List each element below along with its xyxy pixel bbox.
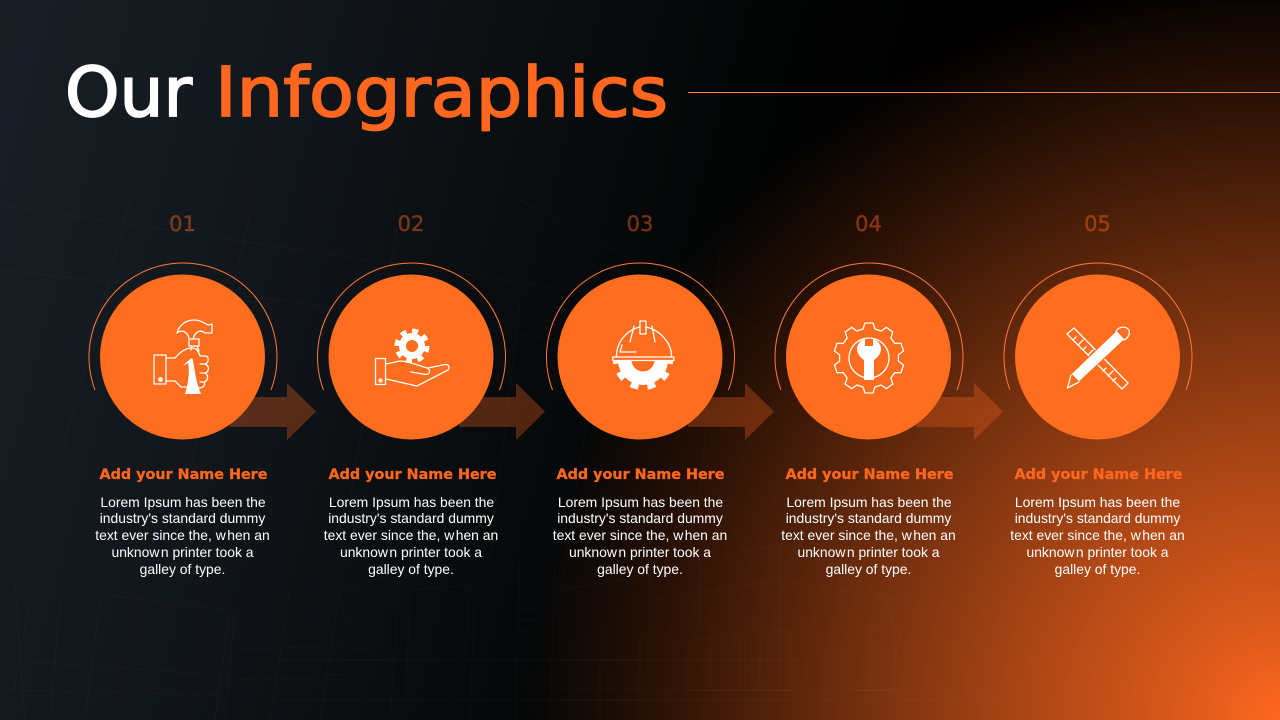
arrow 3 (688, 383, 774, 440)
body text 5 (1010, 494, 1185, 577)
arc 4 (775, 263, 963, 390)
number 04: 04 (855, 212, 882, 236)
arrow 2 (459, 383, 545, 440)
title: Our (65, 53, 193, 133)
title: Infographics (215, 53, 668, 133)
body text 1: text ever since the, when an (95, 527, 270, 543)
body text 2: Lorem Ipsum has been the (329, 494, 494, 510)
body text 1: industry's standard dummy (100, 510, 265, 526)
circle 3 (558, 274, 722, 440)
heading 2: Add your Name Here (328, 467, 497, 483)
circle 1 (100, 274, 265, 440)
body text 5: industry's standard dummy (1015, 510, 1180, 526)
step 3 (546, 212, 774, 577)
body text 4: galley of type. (826, 561, 911, 577)
body text 5: text ever since the, when an (1010, 527, 1185, 543)
body text 1: galley of type. (140, 561, 225, 577)
circle 4 (786, 274, 951, 440)
arc 2 (318, 263, 506, 390)
icon: hand holding gear (376, 331, 449, 386)
circle 5 (1015, 274, 1180, 440)
body text 2: text ever since the, when an (324, 527, 498, 543)
body text 4: industry's standard dummy (786, 510, 951, 526)
body text 4: Lorem Ipsum has been the (786, 494, 952, 510)
body text 4: unknown printer took a (797, 544, 940, 560)
body text 3 (553, 494, 727, 577)
body text 3: Lorem Ipsum has been the (558, 494, 723, 510)
body text 3: unknown printer took a (569, 544, 711, 560)
heading 4: Add your Name Here (786, 467, 954, 483)
body text 4: text ever since the, when an (781, 527, 956, 543)
number 03: 03 (627, 212, 653, 236)
body text 5: galley of type. (1055, 561, 1140, 577)
icon: pencil and ruler (1067, 327, 1129, 389)
step 1 (89, 212, 316, 577)
circle 2 (328, 274, 494, 440)
body text 3: galley of type. (597, 561, 683, 577)
arc 3 (546, 263, 734, 390)
body text 1: unknown printer took a (111, 544, 254, 560)
body text 1 (95, 494, 270, 577)
body text 2: industry's standard dummy (328, 510, 494, 526)
arc 5 (1004, 263, 1192, 390)
arrow 1 (230, 383, 316, 440)
heading 5: Add your Name Here (1014, 467, 1183, 483)
title rule (688, 92, 1280, 94)
icon: hard hat and gear (613, 321, 674, 387)
step 5 (1004, 212, 1192, 577)
background: building wireframe (0, 200, 1000, 720)
body text 2: unknown printer took a (340, 544, 482, 560)
body text 2 (324, 494, 498, 577)
arrow 4 (916, 383, 1003, 440)
arc 1 (89, 263, 277, 390)
body text 3: text ever since the, when an (553, 527, 727, 543)
step 4 (775, 212, 1003, 577)
heading 1: Add your Name Here (100, 467, 268, 483)
step 2 (318, 212, 545, 577)
icon: hand holding hammer (154, 320, 212, 394)
body text 5: unknown printer took a (1026, 544, 1169, 560)
number 01: 01 (169, 212, 196, 236)
number 02: 02 (398, 212, 424, 236)
body text 2: galley of type. (368, 561, 454, 577)
heading 3: Add your Name Here (556, 467, 725, 483)
body text 4 (781, 494, 956, 577)
number 05: 05 (1084, 212, 1111, 236)
icon: gear with wrench (832, 323, 906, 393)
body text 1: Lorem Ipsum has been the (100, 494, 266, 510)
body text 5: Lorem Ipsum has been the (1015, 494, 1180, 510)
body text 3: industry's standard dummy (557, 510, 723, 526)
